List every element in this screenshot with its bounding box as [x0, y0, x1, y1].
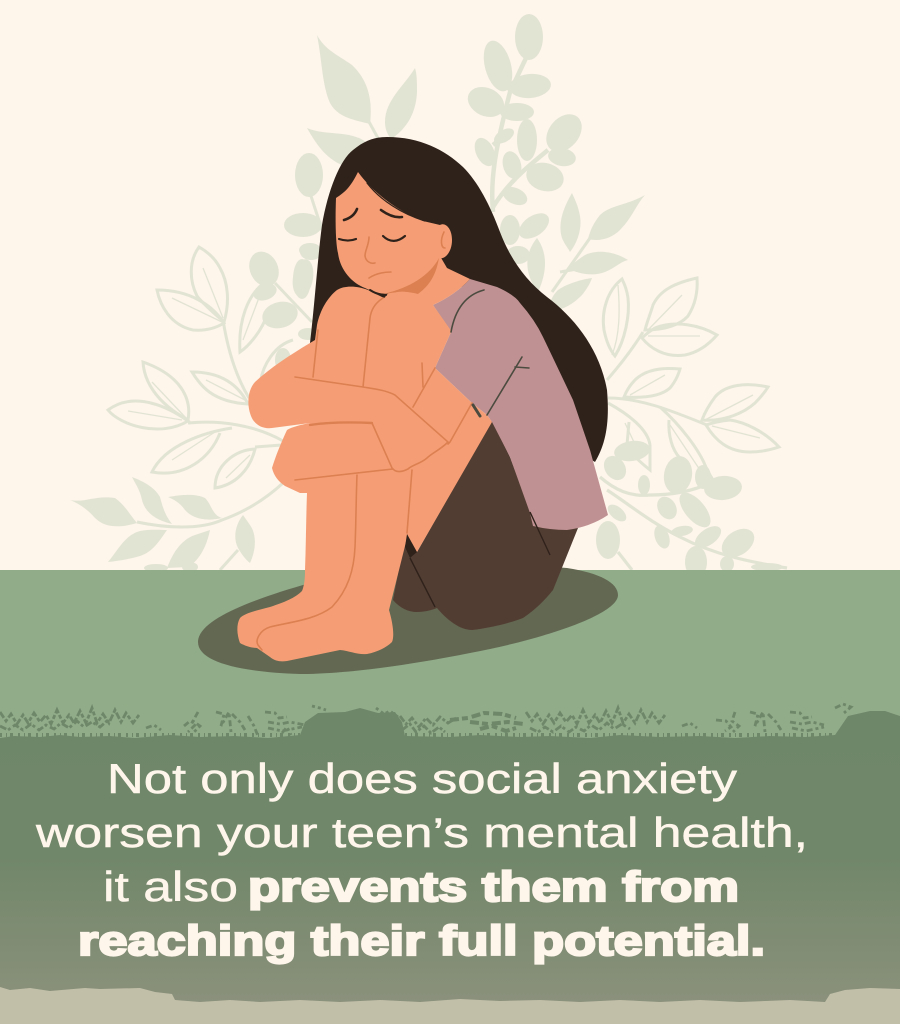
bottom-left solid leaves — [70, 477, 283, 572]
left outlined leaves — [108, 247, 293, 488]
hair — [310, 137, 608, 462]
facial features — [339, 183, 425, 295]
left small solid leaves — [244, 243, 321, 372]
bottom light strip — [0, 987, 900, 1024]
neck shadow — [383, 258, 439, 294]
dark green text band — [0, 708, 900, 1005]
skin crease lines — [257, 298, 472, 650]
top right sprig — [463, 14, 589, 292]
line 2: worsen your teen’s mental health, — [35, 809, 808, 856]
line 4 bold: reaching their full potential. — [78, 917, 765, 964]
shorts — [393, 420, 578, 630]
green floor — [0, 570, 900, 750]
under-knee dark fold — [405, 534, 417, 558]
ground shadow — [198, 566, 618, 674]
foliage behind the girl — [70, 14, 787, 578]
torn edge texture — [0, 704, 851, 736]
lower right cluster — [596, 439, 787, 578]
top solid leaves — [284, 35, 417, 299]
shirt — [433, 279, 608, 530]
neck — [385, 256, 470, 332]
body, arms and legs — [237, 287, 492, 661]
shirt and shorts fold lines — [451, 290, 529, 416]
line 3 bold: prevents them from — [248, 863, 739, 910]
line 1: Not only does social anxiety — [107, 755, 737, 802]
right outlined leaves — [603, 278, 779, 480]
message text — [35, 755, 808, 964]
line 3 regular: it also — [103, 863, 238, 910]
girl figure — [237, 137, 608, 661]
right solid leaves — [550, 193, 645, 311]
face — [336, 172, 452, 294]
